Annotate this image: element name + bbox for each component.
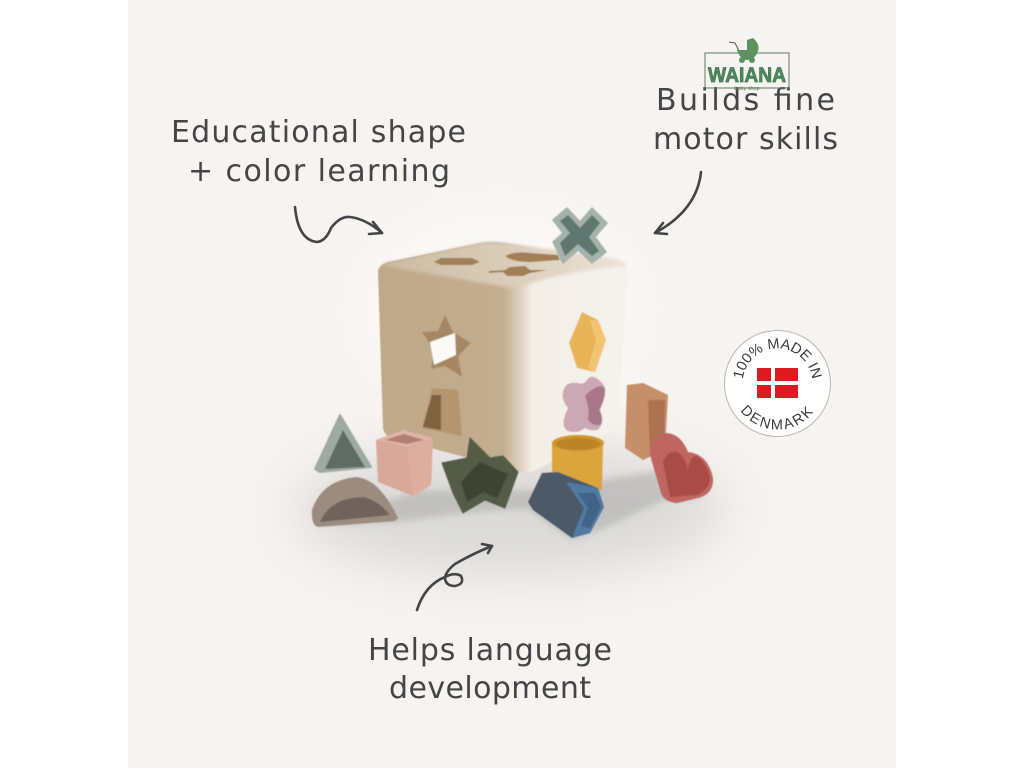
floor shadow [295,200,725,575]
pink square cup [376,430,433,496]
badge bottom text: DENMARK [740,405,814,430]
badge circle [724,330,830,436]
taupe half-moon [312,477,398,527]
logo frame [705,53,789,88]
heading: helps language development: Helps language [368,633,612,668]
arrow: to cube from motor skills label [655,172,701,234]
heading: helps language development: development [389,671,591,706]
ground contact shadows [315,470,705,540]
loose shapes [312,208,713,540]
cube top face [380,242,627,288]
heading: helps language development [368,633,612,706]
heading: educational shape + color learning: + color learning [188,154,450,189]
pink flower cross piece [563,377,605,432]
mustard cylinder [552,435,604,490]
heading: educational shape + color learning: Educational shape [171,115,466,150]
olive star [442,438,518,513]
logo: waiana baby shop [705,38,789,92]
Danish flag [757,368,798,398]
star hole [422,315,471,377]
green cross on top [553,208,607,263]
arrow: to toys from language label [417,544,492,610]
heading: builds fine motor skills: Builds fine [656,83,835,118]
shape-sorter cube [378,242,628,473]
trapezoid piece in hole [422,388,462,436]
heading: builds fine motor skills: motor skills [653,122,838,157]
red heart [650,433,713,503]
page background panel [128,0,896,768]
badge: 100% made in Denmark [724,330,831,437]
logo wordmark: WAIANA [708,64,786,87]
icon: baby stroller [729,38,758,63]
yellow rhombus piece [569,312,606,372]
blue hexagon [528,472,604,538]
badge top text: 100% MADE IN [734,338,822,378]
grey triangle [315,415,371,472]
heading: builds fine motor skills [653,83,838,157]
arrow: to cube from educational label [295,207,382,242]
cube body [378,242,628,473]
heading: educational shape + color learning [171,115,466,189]
top face slots [434,252,560,276]
terracotta rectangle [625,383,668,460]
logo tagline: baby shop [734,86,760,92]
